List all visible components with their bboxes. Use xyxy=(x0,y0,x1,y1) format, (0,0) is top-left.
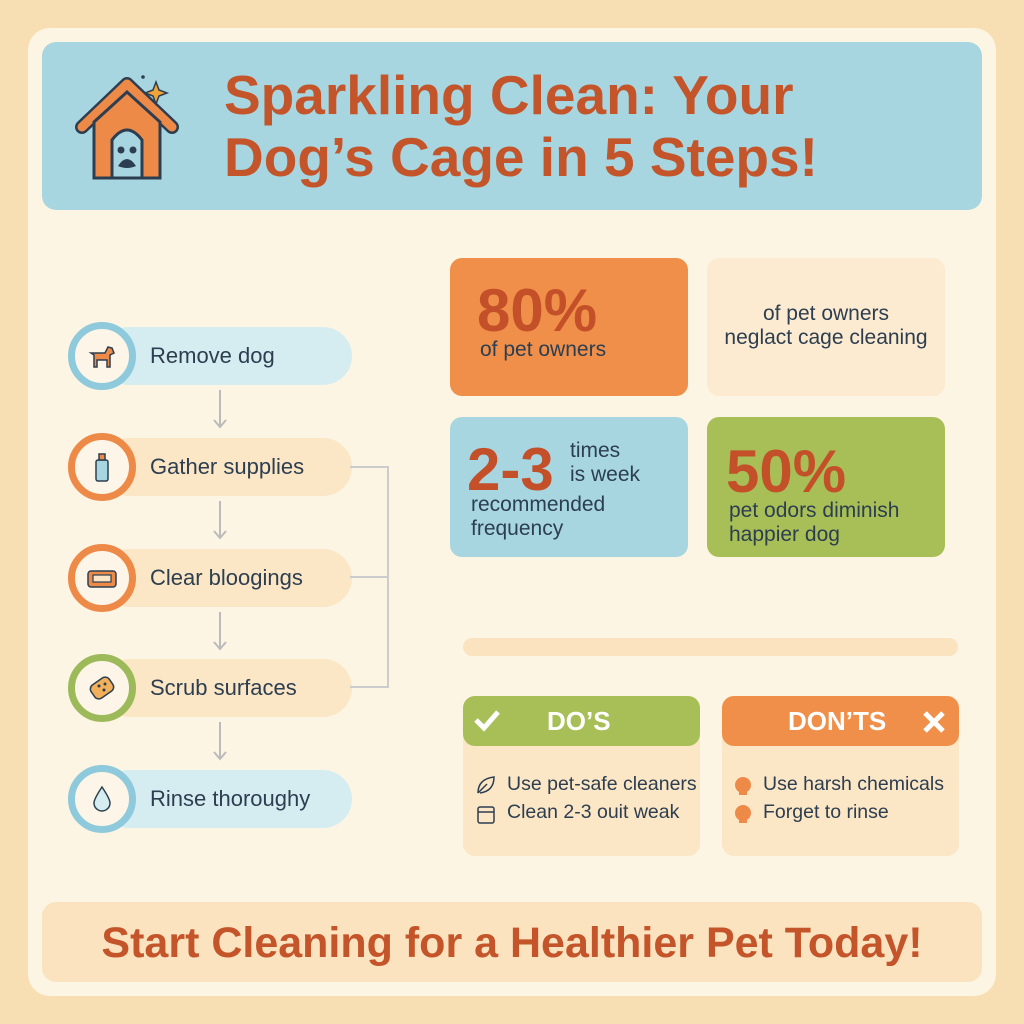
divider bar xyxy=(463,638,958,656)
stat: neglect: of pet owners xyxy=(763,302,889,325)
panel: don'ts xyxy=(722,696,959,856)
don'ts items: Forget to rinse xyxy=(763,801,889,823)
steps list: Clear bloogings xyxy=(150,565,303,590)
stat: 2-3: frequency xyxy=(471,517,563,540)
stat: 50%: happier dog xyxy=(729,523,840,546)
don'ts header: DON’TS xyxy=(788,706,886,736)
don'ts items: Use harsh chemicals xyxy=(763,773,944,795)
title: Sparkling Clean: Your xyxy=(224,64,793,126)
stat: 50%: 50% xyxy=(726,438,846,505)
step 2 xyxy=(68,433,352,501)
arrow xyxy=(213,390,227,428)
header banner xyxy=(42,42,982,210)
stat: 2-3: is week xyxy=(570,463,640,486)
stat: 50%: pet odors diminish xyxy=(729,499,899,522)
step 5 xyxy=(68,765,352,833)
arrow xyxy=(213,612,227,650)
do's items xyxy=(507,773,697,823)
steps list: Rinse thoroughy xyxy=(150,786,310,811)
arrow xyxy=(213,722,227,760)
step 4 xyxy=(68,654,352,722)
stat: 80%: 80% xyxy=(477,277,597,344)
stat: neglect xyxy=(707,258,945,396)
stat: 50% xyxy=(707,417,945,557)
step 3 xyxy=(68,544,352,612)
steps list: Gather supplies xyxy=(150,454,304,479)
stat: 2-3 xyxy=(450,417,688,557)
steps list: Scrub surfaces xyxy=(150,675,297,700)
arrow xyxy=(213,501,227,540)
don'ts items xyxy=(763,773,944,823)
steps list: Remove dog xyxy=(150,343,275,368)
do's items: Use pet-safe cleaners xyxy=(507,773,697,795)
stat: 2-3: times xyxy=(570,439,620,462)
footer banner xyxy=(42,902,982,982)
stat: 80% xyxy=(450,258,688,396)
title xyxy=(224,64,818,188)
title: Dog’s Cage in 5 Steps! xyxy=(224,126,818,188)
do's items: Clean 2-3 ouit weak xyxy=(507,801,679,823)
bracket connector xyxy=(350,466,389,688)
step 1 xyxy=(68,322,352,390)
do's header xyxy=(463,696,700,746)
don'ts header xyxy=(722,696,959,746)
icon: dog house xyxy=(75,75,179,180)
footer banner: Start Cleaning for a Healthier Pet Today! xyxy=(101,919,923,967)
stat: 80%: of pet owners xyxy=(480,338,606,361)
do's header: DO’S xyxy=(547,706,611,736)
stat: 2-3: recommended xyxy=(471,493,605,516)
panel: do's xyxy=(463,696,700,856)
stat: neglect: neglact cage cleaning xyxy=(724,326,928,349)
steps list xyxy=(68,322,352,833)
stat: 2-3: 2-3 xyxy=(467,436,554,503)
